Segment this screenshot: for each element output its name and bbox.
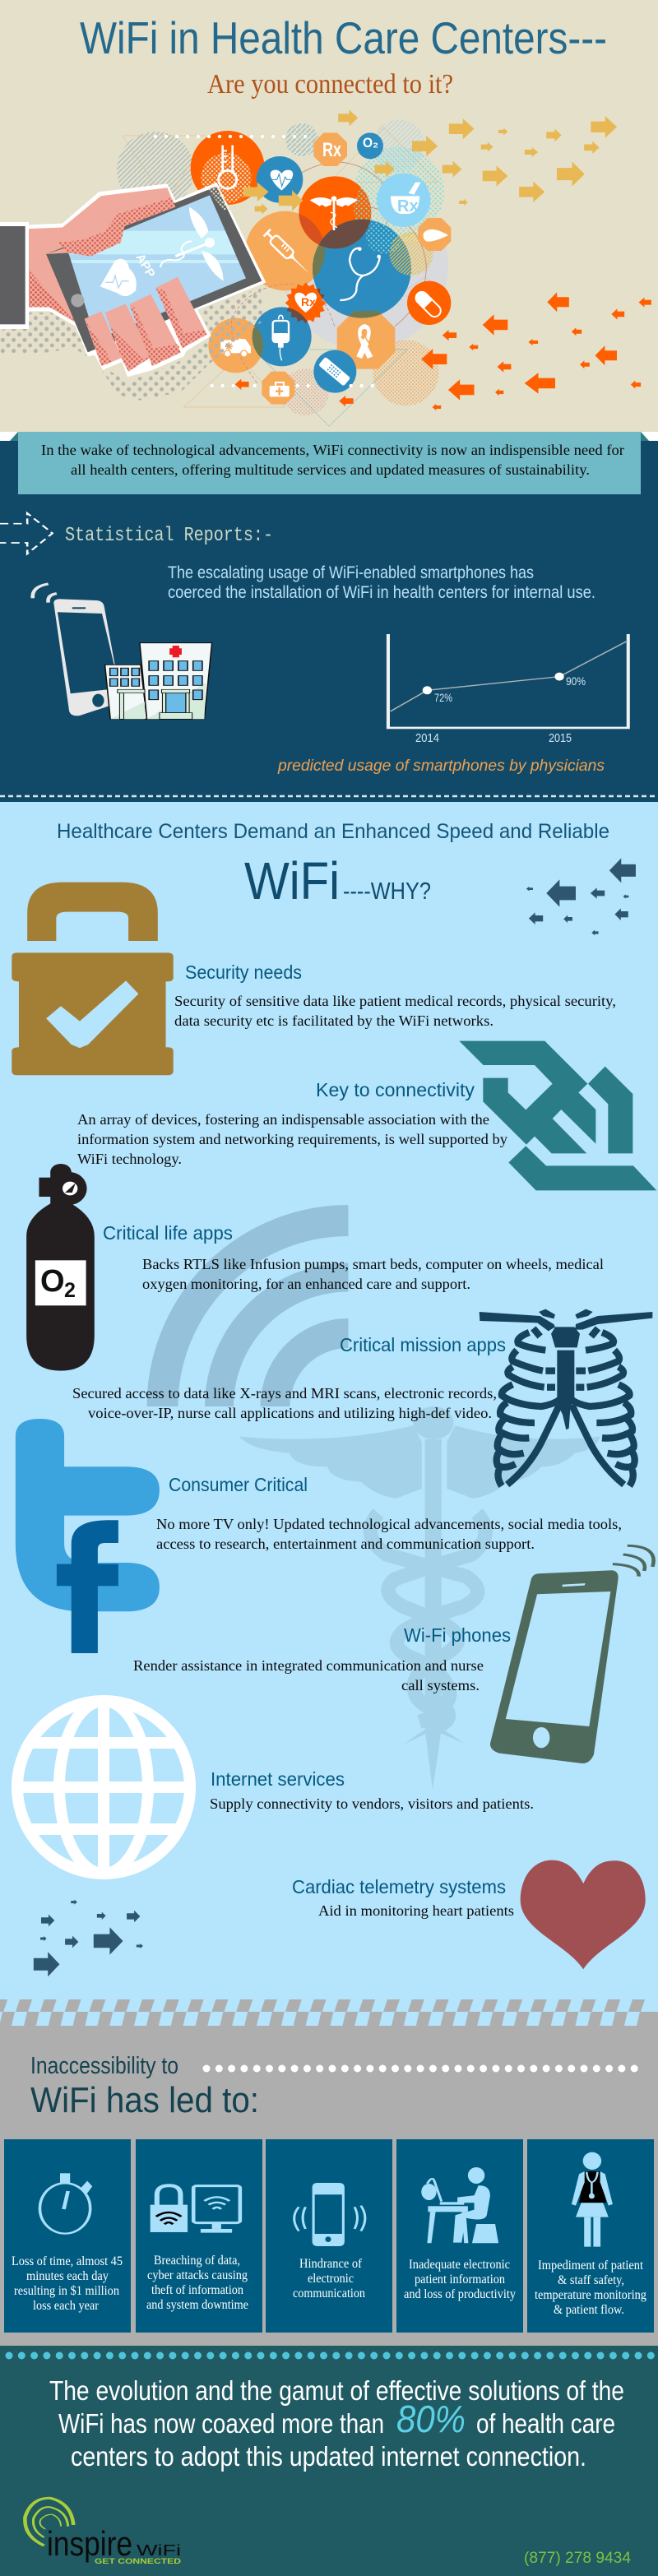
text block: smartphone usage: coerced the installation of WiFi in health centers for internal use. [168,583,595,602]
arrows: dark left [526,858,636,935]
drop [424,229,448,242]
card: impediment of safety: temperature monitoring [535,2288,646,2302]
panel: footer [0,2346,658,2576]
item: wi-fi phones [133,1545,654,1763]
icon: oxygen tank: O [40,1264,65,1299]
item: consumer critical: access to research, entertainment and communication support. [156,1536,535,1552]
winged staff [310,196,358,230]
bandage [318,357,350,387]
illustration: medical app on a smartphone: O₂ [363,135,378,151]
line chart: smartphone usage by physicians [388,634,628,745]
item: security needs: data security etc is facilitated by the WiFi networks. [174,1012,494,1029]
item: internet services [8,1700,534,1874]
chart caption: predicted usage of smartphones by physicians [277,758,605,775]
flying arrows [235,109,651,410]
contact phone number: (877) 278 9434 [524,2550,631,2567]
card: breaching of data: theft of information [151,2283,243,2297]
item: security needs [12,883,616,1075]
text block: conclusion: 80% [396,2398,466,2440]
panel: inaccessibility [0,1999,658,2346]
card: hindrance of communication [266,2139,392,2333]
item: critical life apps: Backs RTLS like Infusion pumps, smart beds, computer on wheels, medical [142,1256,604,1272]
card: breaching of data: cyber attacks causing [147,2268,248,2282]
heart monitor [271,170,293,191]
syringe [262,229,313,277]
card: hindrance of communication: communication [293,2286,365,2300]
icon: smartphone with signal [490,1545,654,1763]
heading: statistical reports: Statistical Reports:- [65,525,273,547]
item: critical life apps: Critical life apps [103,1222,233,1244]
text block: conclusion [49,2375,624,2472]
icon: social media logos [16,1419,160,1653]
background icon: caduceus [239,1406,600,1790]
card: inadequate information: patient information [415,2273,505,2286]
icon: phone and hospital [33,584,212,719]
heading: inaccessibility [30,2053,259,2120]
card: hindrance of communication: Hindrance of [299,2257,363,2271]
panel: header [0,0,658,432]
item: internet services: Supply connectivity to vendors, visitors and patients. [210,1795,534,1812]
illustration labels: Rx [322,139,341,161]
heading: inaccessibility: Inaccessibility to [30,2053,178,2079]
item: cardiac telemetry: Aid in monitoring heart patients [318,1902,514,1919]
icon: oxygen tank [26,1164,95,1371]
sleeve [0,223,29,328]
icon: oxygen tank: 2 [64,1279,76,1302]
first aid kit [270,386,290,396]
item: key to connectivity: Key to connectivity [316,1079,475,1100]
text block: smartphone usage: The escalating usage of WiFi-enabled smartphones has [168,563,534,582]
heading: wifi why [244,851,431,910]
card: inadequate information: and loss of productivity [404,2287,516,2301]
arrows: dark right [34,1900,143,1976]
item: critical mission apps: Secured access to data like X-rays and MRI scans, electronic records, [72,1385,497,1402]
card: loss of time: minutes each day [26,2269,109,2283]
text block: conclusion: of health care [476,2408,615,2439]
item: wi-fi phones: Wi-Fi phones [404,1624,511,1646]
text block: conclusion: WiFi has now coaxed more than [58,2408,384,2439]
icon: globe [8,1700,197,1874]
card: loss of time: Loss of time, almost 45 [12,2254,123,2268]
illustration: medical app on a smartphone: Rx [301,295,316,308]
text block: conclusion: centers to adopt this updated internet connection. [71,2441,586,2472]
item: critical mission apps: Critical mission apps [340,1334,506,1355]
subtitle: Are you connected to it? [207,69,453,100]
item: key to connectivity: information system and networking requirements, is well supported by [77,1131,507,1147]
pill [414,290,443,319]
icon: ribcage [480,1309,652,1486]
item: consumer critical: No more TV only! Updated technological advancements, social media tools, [156,1516,622,1532]
card: loss of time: loss each year [33,2299,100,2313]
line chart: smartphone usage by physicians: 72% [434,691,452,704]
card: breaching of data: Breaching of data, [154,2254,240,2268]
white dot row top [155,132,315,142]
card: hindrance of communication: electronic [308,2272,354,2286]
iv bag [279,315,283,319]
card: inadequate information: Inadequate electronic [409,2258,510,2272]
icon: nurse [572,2152,613,2247]
ribbon [356,337,368,359]
item: wi-fi phones: call systems. [401,1677,480,1693]
item: wi-fi phones: Render assistance in integrated communication and nurse [133,1657,484,1674]
icon: dashed arrow [0,513,53,554]
illustration: medical app on a smartphone [0,109,651,426]
item: critical mission apps [72,1309,652,1486]
mortar [391,196,419,214]
heading: wifi why: WiFi [244,851,340,910]
card: impediment of safety: & patient flow. [554,2303,624,2317]
icon: vibrating phone [294,2183,365,2246]
card: breaching of data: and system downtime [146,2298,248,2312]
logo: inspire wifi: GET CONNECTED [95,2557,182,2565]
card: impediment of safety [527,2139,654,2333]
fingers [85,311,122,366]
item: security needs: Security of sensitive data like patient medical records, physical security, [174,993,616,1009]
item: consumer critical [16,1419,622,1653]
line chart: smartphone usage by physicians: 90% [566,674,586,688]
illustration: medical app on a smartphone: Rx [397,197,419,215]
icon: stopwatch [39,2173,92,2234]
white dot row bottom [212,380,373,391]
panel: statistical reports [0,432,658,802]
item: internet services: Internet services [211,1768,345,1790]
item: critical life apps: oxygen monitoring, for an enhanced care and support. [142,1276,470,1292]
screen emblem [100,207,224,296]
stethoscope [340,248,380,300]
logo: inspire wifi: inspire [47,2524,132,2563]
item: consumer critical: Consumer Critical [169,1474,308,1495]
card: loss of time [4,2139,131,2333]
icon: person at desk [421,2167,498,2243]
heading: healthcare centers demand: Healthcare Centers Demand an Enhanced Speed and Reliable [57,820,609,843]
illustration: medical app on a smartphone: APP [133,252,158,280]
intro banner: all health centers, offering multitude services and updated measures of sustainability. [71,461,590,478]
gray dots, hand and phone [0,183,266,401]
item: key to connectivity: WiFi technology. [77,1151,182,1167]
item: key to connectivity [77,1041,656,1190]
heading: wifi why: ----WHY? [343,878,431,905]
background icon: wifi arcs [163,1221,349,1406]
item: key to connectivity: An array of devices, fostering an indispensable association with the [77,1111,489,1128]
intro banner [18,432,641,494]
icon: network logo [459,1041,656,1190]
item: critical mission apps: voice-over-IP, nurse call applications and utilizing high-def video. [88,1405,492,1421]
line chart: smartphone usage by physicians: 2014 [415,731,439,745]
logo: inspire wifi [25,2498,182,2565]
heading: inaccessibility: WiFi has led to: [30,2080,259,2120]
card: loss of time: resulting in $1 million [14,2284,119,2298]
heart on star [294,293,317,313]
text block: smartphone usage [168,563,595,602]
ambulance [220,339,251,353]
item: cardiac telemetry: Cardiac telemetry systems [292,1876,506,1897]
item: security needs: Security needs [185,961,302,983]
card: breaching of data [136,2139,262,2333]
card: impediment of safety: & staff safety, [558,2273,624,2287]
top circle [191,131,265,205]
card: impediment of safety: Impediment of patient [538,2259,643,2273]
item: cardiac telemetry [292,1860,646,1969]
line chart: smartphone usage by physicians: 2015 [549,731,572,745]
icon: heart [521,1860,646,1969]
logo: inspire wifi: WiFi [137,2542,181,2559]
card: inadequate information [396,2139,523,2333]
icon: lock and monitor [151,2185,240,2233]
item: critical life apps [26,1164,604,1371]
intro banner: In the wake of technological advancements, WiFi connectivity is now an indispensible need for [41,442,624,458]
icon: padlock [12,883,174,1075]
thermometer [219,146,237,188]
